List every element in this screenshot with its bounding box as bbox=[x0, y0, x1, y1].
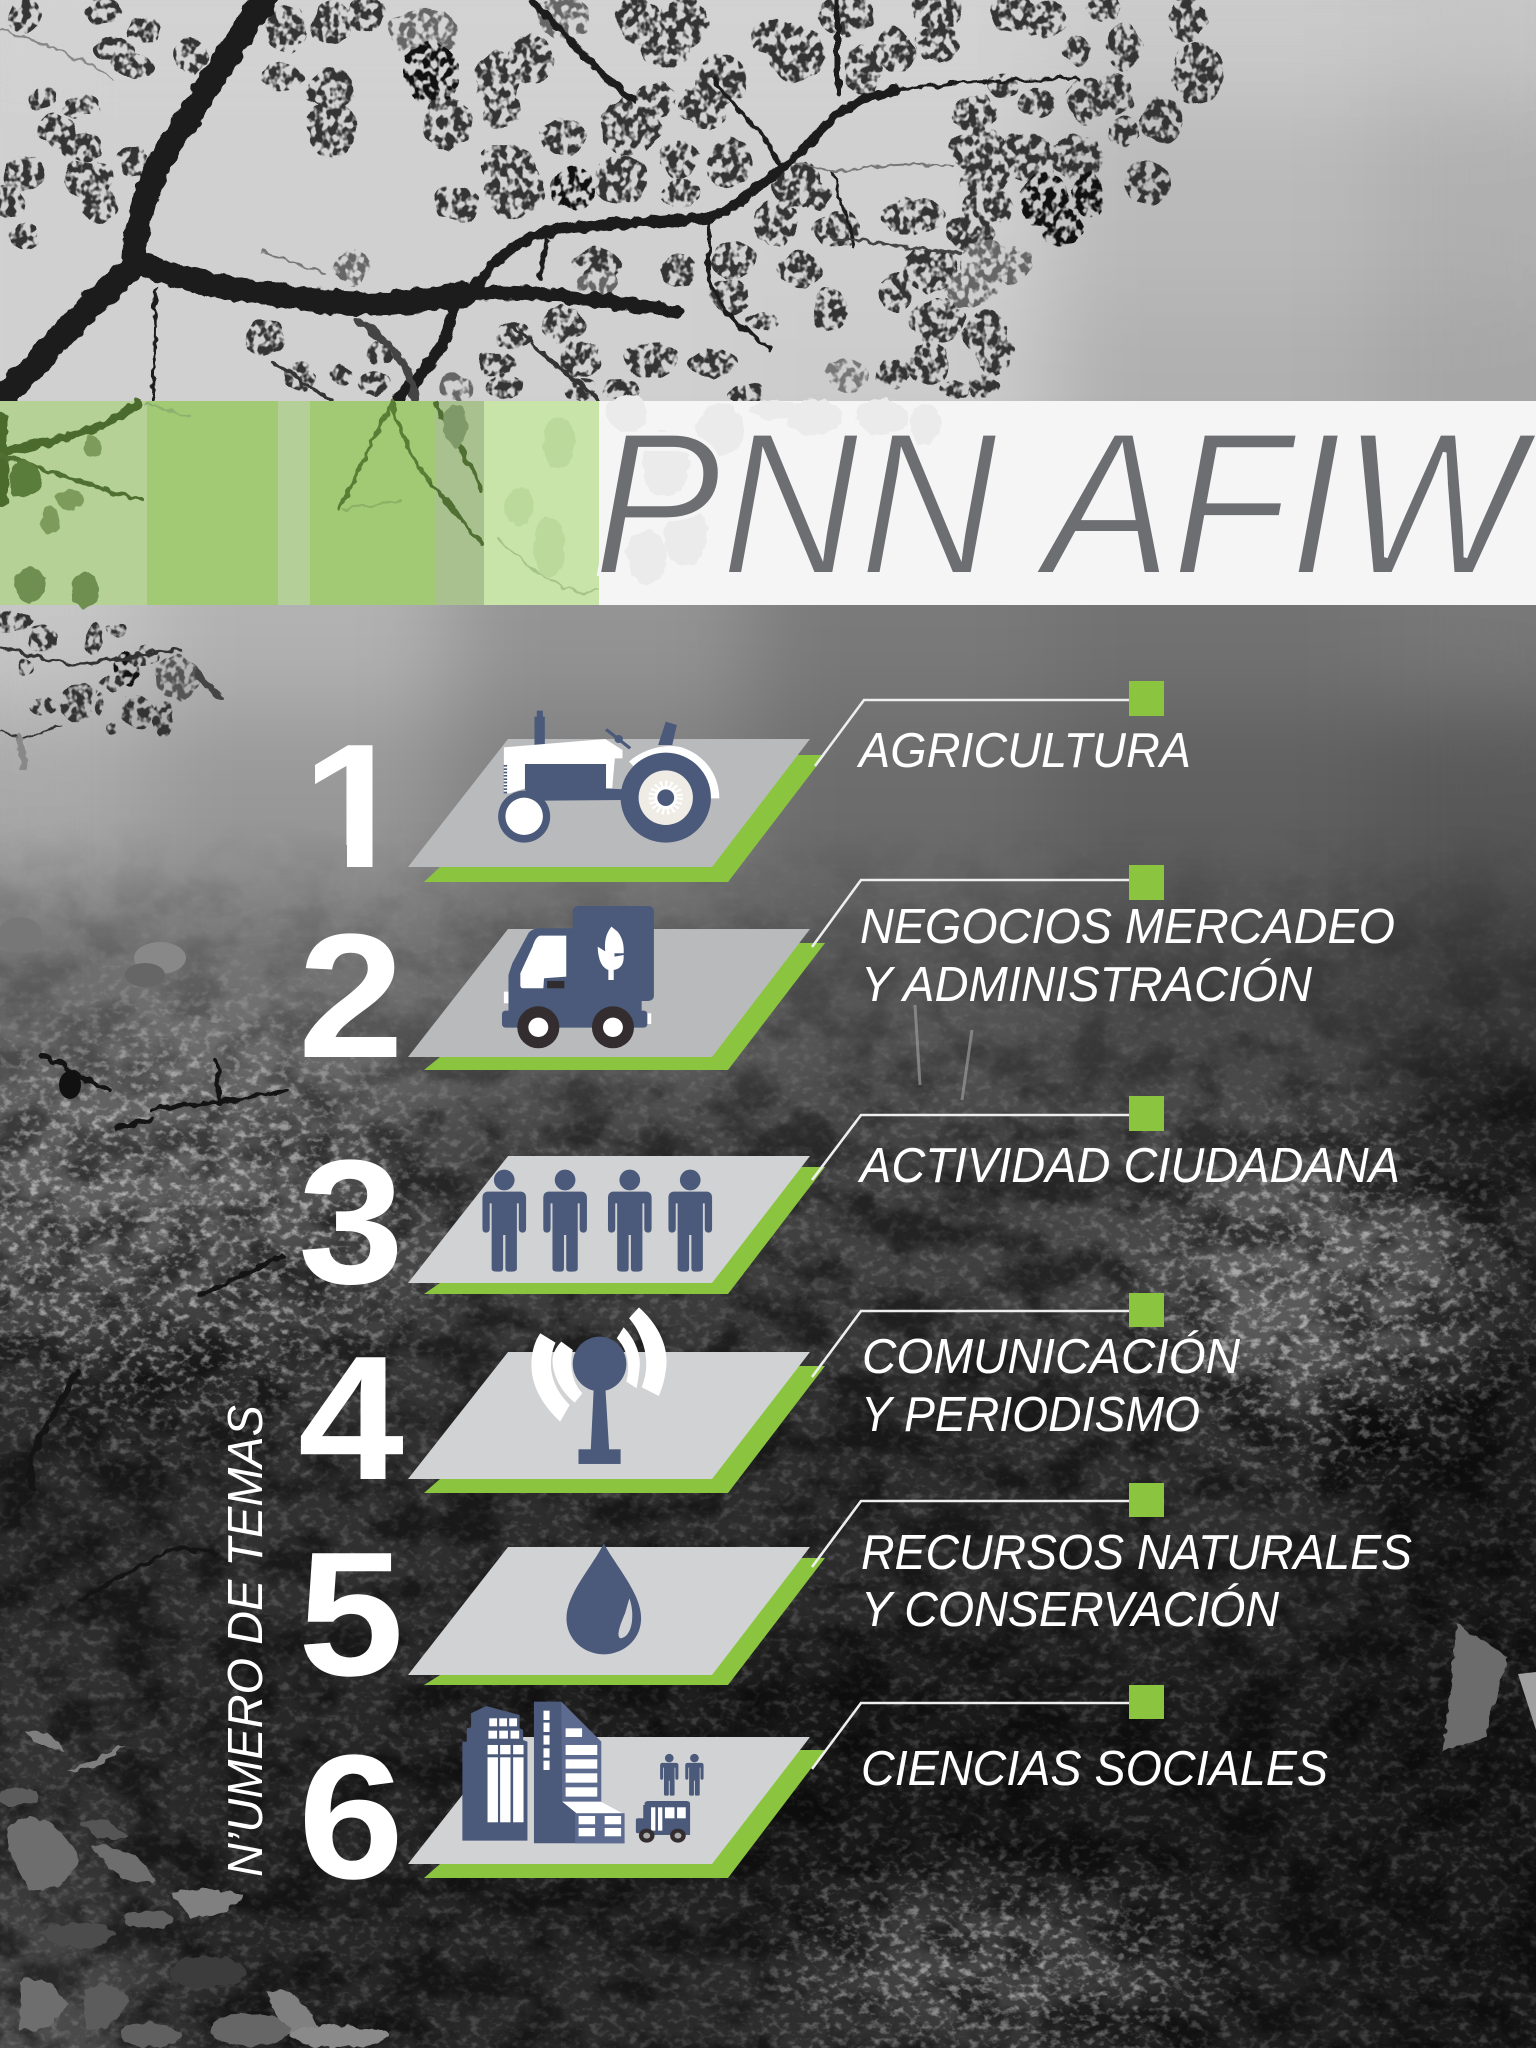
connector line bbox=[815, 700, 1129, 766]
connector line bbox=[812, 1115, 1129, 1180]
number 3: 3 bbox=[298, 1123, 404, 1321]
green square marker bbox=[1129, 865, 1164, 900]
label: COMUNICACIÓN bbox=[862, 1330, 1241, 1384]
grey plane bbox=[408, 1156, 810, 1283]
connector line bbox=[812, 1311, 1129, 1377]
item 5: recursos naturales bbox=[298, 1483, 1412, 1713]
green shadow plane bbox=[424, 1750, 825, 1878]
label: NEGOCIOS MERCADEO bbox=[860, 900, 1395, 954]
banner green column 4 bbox=[310, 401, 435, 605]
banner green column 2 bbox=[147, 401, 278, 605]
grey plane bbox=[408, 1352, 810, 1479]
connector line bbox=[812, 1703, 1129, 1769]
banner green column 6 bbox=[484, 401, 599, 605]
item 6: ciencias sociales bbox=[298, 1685, 1328, 1916]
item 1: agricultura bbox=[302, 681, 1191, 905]
label: RECURSOS NATURALES bbox=[861, 1526, 1412, 1580]
green shadow plane bbox=[424, 1366, 825, 1493]
banner green column 5 bbox=[435, 401, 484, 605]
grey plane bbox=[408, 929, 810, 1057]
green square marker bbox=[1129, 1483, 1164, 1517]
green square marker bbox=[1129, 1685, 1164, 1719]
green shadow plane bbox=[424, 1167, 825, 1294]
faint leaves in the green columns bbox=[9, 403, 575, 608]
grey plane bbox=[408, 1737, 810, 1864]
banner green column 1 bbox=[0, 401, 147, 605]
label: Y CONSERVACIÓN bbox=[861, 1583, 1280, 1637]
label: Y ADMINISTRACIÓN bbox=[861, 958, 1313, 1012]
label: AGRICULTURA bbox=[856, 724, 1191, 778]
green shadow plane bbox=[424, 755, 825, 882]
number 1: 1 bbox=[302, 707, 408, 905]
vertical axis label: N’UMERO DE TEMAS bbox=[219, 1405, 273, 1877]
green square marker bbox=[1129, 1293, 1164, 1327]
banner green column 3 bbox=[278, 401, 310, 605]
label: CIENCIAS SOCIALES bbox=[861, 1742, 1328, 1796]
icon: four people bbox=[482, 1170, 712, 1272]
green shadow plane bbox=[424, 943, 825, 1070]
label: Y PERIODISMO bbox=[861, 1388, 1200, 1442]
icon: water drop bbox=[566, 1543, 641, 1654]
faint leaves in the white panel bbox=[607, 393, 941, 583]
item 2: negocios bbox=[298, 865, 1395, 1095]
connector line bbox=[812, 1501, 1129, 1567]
icon: delivery truck bbox=[502, 906, 654, 1048]
banner bbox=[0, 393, 1536, 608]
item 3: actividad ciudadana bbox=[298, 1096, 1400, 1321]
number 5: 5 bbox=[298, 1515, 404, 1713]
connector line bbox=[812, 880, 1129, 947]
branches seen through the green columns bbox=[0, 403, 598, 592]
label: ACTIVIDAD CIUDADANA bbox=[857, 1139, 1400, 1193]
grey plane bbox=[408, 1547, 810, 1675]
icon: radio antenna bbox=[531, 1307, 667, 1464]
number 6: 6 bbox=[298, 1718, 404, 1916]
grey plane bbox=[408, 739, 810, 867]
item 4: comunicacion bbox=[298, 1293, 1241, 1517]
icon: buildings, people and bus bbox=[462, 1702, 704, 1843]
number 4: 4 bbox=[298, 1319, 404, 1517]
green shadow plane bbox=[424, 1558, 825, 1685]
icon: tractor bbox=[498, 711, 719, 843]
green square marker bbox=[1129, 1096, 1164, 1131]
banner white panel bbox=[599, 401, 1536, 605]
number 2: 2 bbox=[298, 897, 404, 1095]
green square marker bbox=[1129, 681, 1164, 716]
